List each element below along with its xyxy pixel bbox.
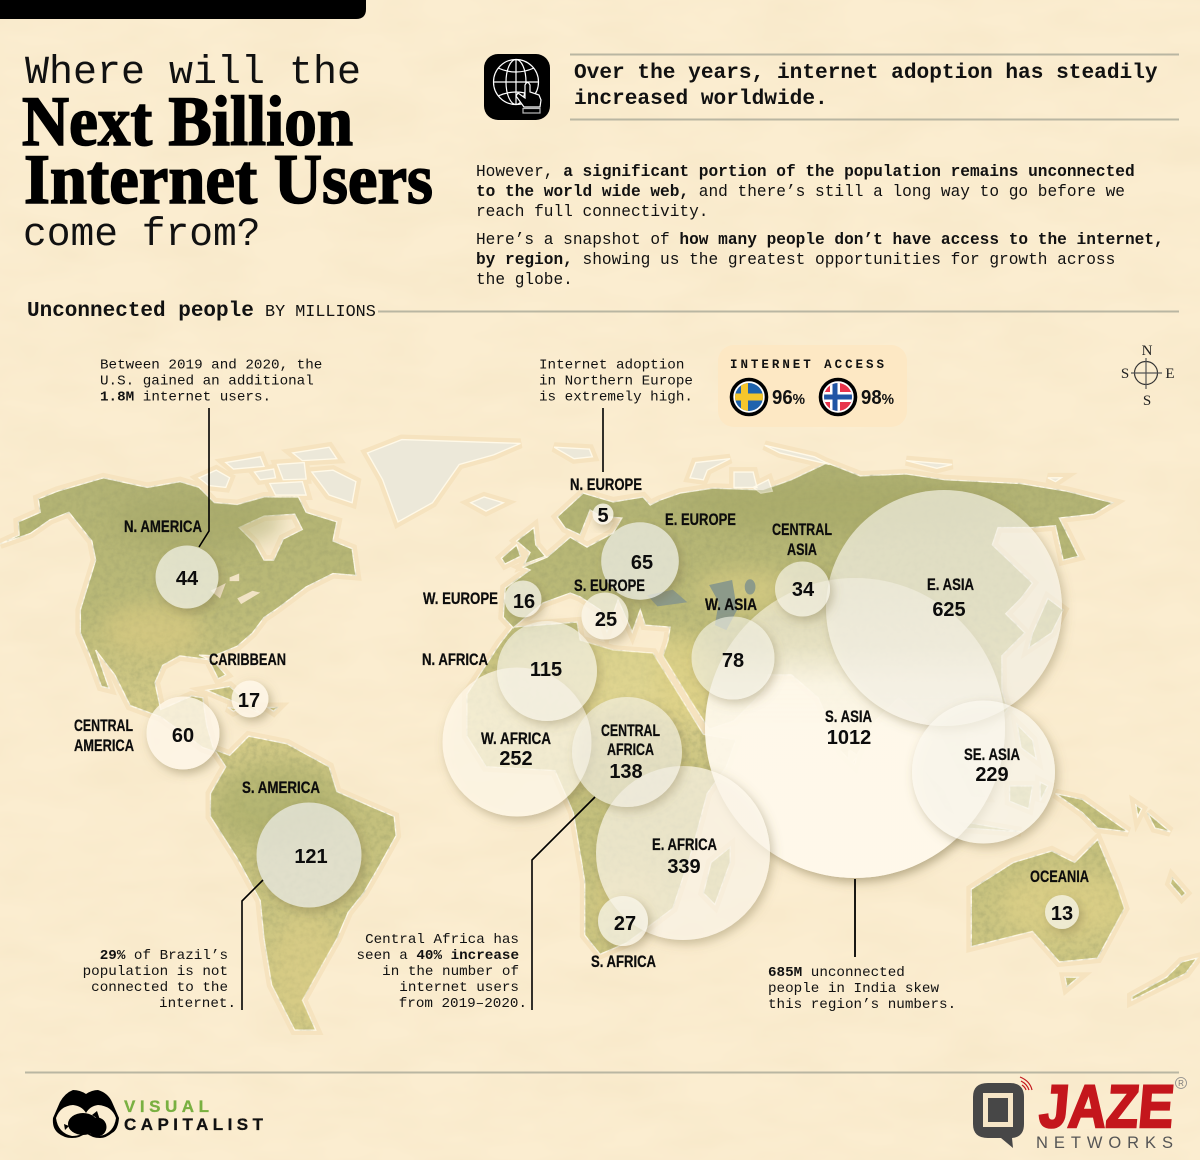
label: S. America 121: S. AMERICA [242, 778, 320, 797]
note: Brazil: internet. [159, 996, 236, 1012]
icon: compass: S [1121, 366, 1129, 382]
label: Central Asia 34: CENTRAL [772, 520, 832, 539]
label: S. Africa 27: 27 [614, 913, 636, 935]
icon: globe with pointing hand [484, 54, 550, 120]
label: Oceania 13: 13 [1051, 903, 1073, 925]
bubble: South Asia [705, 578, 1005, 878]
label: E. Asia 625: E. ASIA [927, 575, 974, 594]
logo: Jaze Networks: R [1178, 1079, 1184, 1088]
panel: internet access: 96% [772, 387, 805, 409]
panel: internet access [718, 345, 907, 427]
logo: Jaze Networks: JAZE [1037, 1073, 1177, 1140]
bubble: East Africa [596, 766, 770, 940]
footer divider [25, 1072, 1179, 1074]
bubble: Southern Europe [582, 592, 628, 640]
label: SE. Asia 229 [964, 745, 1020, 786]
note: Northern Europe: in Northern Europe [539, 374, 693, 390]
top black tab [0, 0, 366, 19]
title: Next Billion [22, 83, 353, 161]
intro callout: increased worldwide. [574, 87, 828, 111]
bubble: Caribbean [232, 680, 268, 718]
leader line: North America [199, 408, 209, 547]
bubble: South America [256, 802, 362, 908]
label: Caribbean 17: CARIBBEAN [209, 650, 286, 669]
bubble: Western Europe [504, 580, 542, 618]
label: Central Africa 138: AFRICA [607, 740, 654, 759]
label: W. Asia 78: W. ASIA [705, 595, 757, 614]
leader line: South Asia [854, 879, 856, 957]
label: Oceania 13 [1030, 867, 1089, 925]
intro text [476, 163, 1164, 289]
bubble: North Africa [497, 621, 597, 721]
icon: compass: S [1143, 393, 1151, 409]
bubble: Central Asia [775, 562, 830, 616]
panel: internet access: INTERNET ACCESS [730, 358, 884, 372]
label: SE. Asia 229: 229 [975, 764, 1009, 786]
label: E. Europe 65 [631, 510, 736, 574]
icon: Sweden flag [732, 380, 766, 414]
logo: Jaze Networks [973, 1073, 1186, 1152]
label: E. Asia 625: 625 [932, 599, 966, 621]
label: S. Asia 1012 [825, 707, 872, 749]
intro text: Here’s a snapshot of how many people don’t have access to the internet, [476, 231, 1164, 249]
note: Brazil: connected to the [91, 980, 228, 996]
note: Central Africa: internet users [399, 980, 519, 996]
bubble: West Africa [442, 668, 592, 816]
label: W. Europe 16: W. EUROPE [423, 589, 498, 608]
label: W. Africa 252: 252 [499, 748, 533, 770]
title: come from? [23, 212, 261, 257]
label: E. Europe 65: E. EUROPE [665, 510, 736, 529]
label: N. Africa 115: 115 [530, 659, 562, 681]
label: W. Africa 252 [481, 729, 551, 770]
label: E. Europe 65: 65 [631, 552, 653, 574]
label: N. America 44 [124, 517, 202, 590]
label: Central America 60 [74, 716, 194, 755]
bubble: Eastern Europe [601, 522, 679, 600]
label: E. Africa 339: E. AFRICA [652, 835, 717, 854]
logo: Jaze Networks: NETWORKS [1036, 1134, 1173, 1152]
label: N. Africa 115: N. AFRICA [422, 650, 488, 669]
title: Internet Users [24, 141, 433, 219]
note: Northern Europe: Internet adoption [539, 358, 684, 374]
label: Central Africa 138: CENTRAL [601, 721, 660, 740]
note: Central Africa: in the number of [382, 964, 519, 980]
label: N. Africa 115 [422, 650, 562, 681]
label: Central America 60: AMERICA [74, 736, 134, 755]
label: E. Africa 339: 339 [667, 856, 701, 878]
title: Where will the [25, 51, 361, 96]
label: N. America 44: N. AMERICA [124, 517, 202, 536]
leader line: Northern Europe [602, 408, 604, 472]
note: U.S. internet users: Between 2019 and 2020, the [100, 358, 322, 374]
label: Central Africa 138 [601, 721, 660, 783]
label: W. Asia 78: 78 [722, 650, 744, 672]
title [22, 51, 433, 257]
label: E. Africa 339 [652, 835, 717, 878]
note: Northern Europe [539, 358, 693, 406]
label: W. Africa 252: W. AFRICA [481, 729, 551, 748]
label: S. Africa 27 [591, 913, 656, 971]
label: N. Europe 5 [570, 475, 642, 527]
intro text: reach full connectivity. [476, 203, 708, 221]
label: W. Europe 16: 16 [513, 591, 535, 613]
note: Northern Europe: is extremely high. [539, 390, 693, 406]
bubble: Oceania [1045, 895, 1079, 929]
note: Central Africa [356, 932, 527, 1012]
label: Caribbean 17: 17 [238, 690, 260, 712]
label: W. Asia 78 [705, 595, 757, 672]
bubble: Central Africa [572, 697, 682, 807]
label: Caribbean 17 [209, 650, 286, 712]
icon: compass: N [1142, 343, 1153, 359]
icon: Norway flag [820, 380, 856, 414]
note: India: 685M unconnected [768, 965, 905, 981]
note: Central Africa: Central Africa has [365, 932, 519, 948]
label: Central Asia 34: 34 [792, 579, 815, 601]
note: India [768, 965, 956, 1013]
label: N. Europe 5: 5 [597, 505, 609, 527]
bubble: Central America [146, 696, 220, 770]
leader line: South America [242, 880, 263, 1010]
icon: compass: E [1165, 366, 1175, 382]
label: S. Europe 25 [574, 576, 645, 631]
bubble: North America [156, 546, 218, 608]
logo: Visual Capitalist: CAPITALIST [124, 1115, 264, 1134]
section heading: unconnected people: Unconnected people [27, 300, 254, 323]
label: SE. Asia 229: SE. ASIA [964, 745, 1020, 764]
label: S. Asia 1012: 1012 [827, 727, 871, 749]
bubble: East Asia [826, 490, 1062, 726]
note: Brazil [83, 948, 236, 1012]
label: S. Asia 1012: S. ASIA [825, 707, 872, 726]
bubble: Northern Europe [592, 504, 614, 524]
logo: Visual Capitalist [53, 1090, 264, 1138]
label: N. America 44: 44 [176, 568, 199, 590]
note: India: people in India skew [768, 981, 939, 997]
intro text: the globe. [476, 271, 573, 289]
note: Central Africa: seen a 40% increase [356, 948, 519, 964]
note: U.S. internet users: U.S. gained an additional [100, 374, 314, 390]
intro text: to the world wide web, and there’s still a long way to go before we [476, 183, 1125, 201]
intro text: However, a significant portion of the population remains unconnected [476, 163, 1135, 181]
label: S. America 121: 121 [294, 846, 328, 868]
note: Central Africa: from 2019–2020. [399, 996, 527, 1012]
section heading: unconnected people: BY MILLIONS [265, 303, 376, 322]
bubble: Western Asia [692, 616, 774, 700]
world map [0, 440, 1197, 1030]
lakes and inland seas [210, 574, 755, 630]
label: Central America 60: 60 [172, 725, 194, 747]
intro text: by region, showing us the greatest opportunities for growth across [476, 251, 1115, 269]
leader line: Central Africa [532, 797, 595, 1010]
label: E. Asia 625 [927, 575, 974, 621]
label: N. Europe 5: N. EUROPE [570, 475, 642, 494]
note: U.S. internet users: 1.8M internet users. [100, 390, 271, 406]
label: S. Europe 25: S. EUROPE [574, 576, 645, 595]
icon: compass [1121, 343, 1175, 409]
note: Brazil: 29% of Brazil’s [100, 948, 228, 964]
logo: Visual Capitalist: VISUAL [124, 1097, 209, 1116]
label: S. America 121 [242, 778, 328, 868]
note: India: this region’s numbers. [768, 997, 956, 1013]
section heading: unconnected people [27, 300, 1179, 323]
label: Central Asia 34: ASIA [787, 540, 817, 559]
label: S. Africa 27: S. AFRICA [591, 952, 656, 971]
note: U.S. internet users [100, 358, 322, 406]
label: W. Europe 16 [423, 589, 535, 613]
note: Brazil: population is not [83, 964, 228, 980]
label: Central America 60: CENTRAL [74, 716, 133, 735]
intro callout: Over the years, internet adoption has steadily [574, 61, 1158, 85]
label: Oceania 13: OCEANIA [1030, 867, 1089, 886]
label: S. Europe 25: 25 [595, 609, 617, 631]
label: Central Africa 138: 138 [609, 761, 643, 783]
bubble: Southern Africa [598, 896, 648, 946]
label: Central Asia 34 [772, 520, 832, 601]
panel: internet access: 98% [861, 387, 894, 409]
bubble: Southeast Asia [912, 700, 1055, 844]
intro callout [570, 54, 1179, 120]
